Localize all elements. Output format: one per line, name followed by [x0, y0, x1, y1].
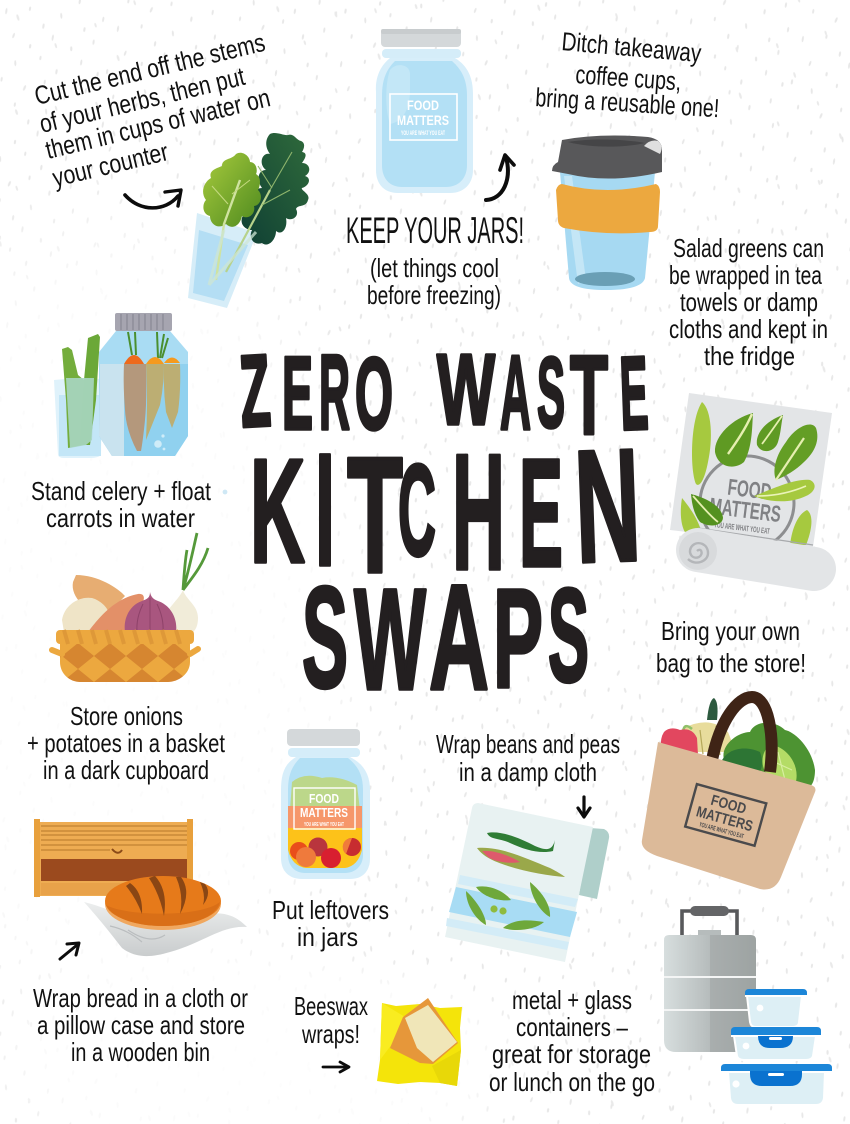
- icon: vegetable basket: [52, 533, 208, 682]
- stamp: bag logo: YOU ARE WHAT YOU EAT: [698, 821, 744, 840]
- title: C: [398, 437, 436, 583]
- label: jar logo: YOU ARE WHAT YOU EAT: [401, 131, 445, 137]
- label: leftovers jar logo: YOU ARE WHAT YOU EAT: [304, 822, 344, 828]
- text: beans and peas tip: in a damp cloth: [459, 757, 597, 787]
- icon: bread bin and loaf: [34, 819, 247, 956]
- label: leftovers jar logo: MATTERS: [300, 805, 348, 820]
- icon: salad in tea towel: YOU ARE WHAT YOU EAT: [714, 520, 770, 536]
- icon: salad in tea towel: MATTERS: [708, 493, 782, 527]
- text: containers tip: great for storage: [492, 1039, 651, 1069]
- title: A: [429, 553, 489, 721]
- text: beans and peas tip: Wrap beans and peas: [436, 729, 620, 759]
- text: celery and carrots tip: Stand celery + float: [31, 476, 212, 506]
- text: herbs tip: [31, 27, 273, 193]
- text: bread tip: [33, 983, 248, 1067]
- arrow: to beans cloth: [578, 797, 590, 817]
- icon: salad in tea towel: [670, 393, 832, 570]
- text: beeswax tip: wraps!: [301, 1019, 360, 1049]
- text: herbs tip: Cut the end off the stems: [31, 27, 268, 111]
- title: A: [500, 334, 531, 452]
- title: S: [302, 557, 348, 718]
- title: E: [519, 427, 563, 599]
- label: jar logo: MATTERS: [397, 112, 449, 128]
- title: P: [493, 559, 543, 717]
- text: containers tip: containers –: [516, 1012, 628, 1042]
- text: beans and peas tip: [436, 729, 620, 787]
- text: beeswax tip: [294, 991, 368, 1049]
- text: leftovers tip: [272, 895, 389, 952]
- title: R: [319, 332, 350, 452]
- title: T: [570, 333, 608, 458]
- text: celery and carrots tip: carrots in water: [46, 503, 195, 533]
- icon: herbs in a glass: [188, 133, 309, 308]
- icon: empty food matters jar: [376, 29, 473, 193]
- infographic canvas: E: [618, 336, 650, 452]
- text: beeswax tip: Beeswax: [294, 991, 368, 1021]
- text: containers tip: or lunch on the go: [489, 1067, 655, 1097]
- text: containers tip: metal + glass: [512, 985, 632, 1015]
- text: bread tip: a pillow case and store: [37, 1010, 245, 1040]
- label: leftovers jar logo: FOOD: [309, 791, 339, 806]
- title: Z: [237, 333, 273, 449]
- title: S: [537, 337, 565, 449]
- icon: glass containers stack: [721, 989, 832, 1105]
- label: jar logo: [390, 94, 457, 140]
- text: onions and potatoes tip: in a dark cupboard: [43, 755, 209, 785]
- text: herbs tip: of your herbs, then put: [36, 61, 248, 139]
- title: H: [452, 420, 505, 604]
- icon: tote bag with vegetables: [642, 697, 816, 890]
- title: W: [354, 559, 426, 720]
- text: celery and carrots tip: [31, 476, 212, 533]
- text: bring your own bag: Bring your own: [661, 616, 800, 646]
- title: I: [315, 420, 335, 599]
- text: bread tip: Wrap bread in a cloth or: [33, 983, 248, 1013]
- icon: beeswax wrapped cheese: [377, 998, 462, 1086]
- title: K: [250, 429, 305, 594]
- text: leftovers tip: Put leftovers: [272, 895, 389, 925]
- stamp: bag logo: MATTERS: [694, 803, 755, 835]
- icon: reusable coffee cup: [552, 136, 662, 290]
- title: O: [355, 337, 393, 451]
- icon: salad in tea towel: FOOD: [726, 474, 773, 505]
- leaves on towel: [691, 413, 817, 525]
- text: coffee cups tip: [535, 26, 720, 123]
- title: [237, 332, 650, 721]
- arrow: to reusable cup: [486, 155, 514, 200]
- arrow: to bread cloth: [60, 943, 79, 959]
- text: bring your own bag: [656, 616, 806, 678]
- icon: celery and carrots in jars: [54, 313, 188, 458]
- text: keep your jars heading: KEEP YOUR JARS!: [346, 210, 524, 251]
- icon: beans and peas in cloth: [445, 803, 609, 962]
- text: onions and potatoes tip: + potatoes in a basket: [27, 728, 226, 758]
- text: onions and potatoes tip: Store onions: [70, 701, 183, 731]
- label: jar logo: FOOD: [407, 97, 439, 113]
- text: containers tip: [489, 985, 655, 1097]
- text: coffee cups tip: bring a reusable one!: [535, 82, 720, 123]
- text: salad greens tip: the fridge: [704, 341, 795, 371]
- stamp: bag logo: [685, 784, 766, 846]
- text: keep your jars heading: (let things cool: [370, 253, 499, 283]
- text: keep your jars heading: before freezing): [367, 280, 501, 310]
- text: salad greens tip: [669, 233, 828, 371]
- title: N: [572, 415, 643, 596]
- icon: metal tiffin: [664, 906, 756, 1052]
- text: leftovers tip: in jars: [297, 922, 358, 952]
- title: S: [548, 562, 589, 710]
- title: W: [437, 334, 495, 446]
- label: leftovers jar logo: [294, 788, 355, 829]
- text: herbs tip: them in cups of water on: [42, 82, 273, 165]
- text: coffee cups tip: coffee cups,: [575, 59, 682, 96]
- icon: leftovers jar: [281, 729, 370, 879]
- title: T: [347, 423, 403, 607]
- title: E: [282, 336, 313, 452]
- text: keep your jars heading: [346, 210, 524, 310]
- text: onions and potatoes tip: [27, 701, 226, 785]
- text: herbs tip: your counter: [49, 136, 171, 193]
- text: coffee cups tip: Ditch takeaway: [560, 26, 703, 68]
- text: bread tip: in a wooden bin: [71, 1037, 210, 1067]
- text: bring your own bag: bag to the store!: [656, 648, 806, 678]
- arrow: to herbs: [125, 190, 181, 208]
- stamp: bag logo: FOOD: [709, 792, 748, 818]
- arrow: to beeswax wrap: [323, 1062, 349, 1072]
